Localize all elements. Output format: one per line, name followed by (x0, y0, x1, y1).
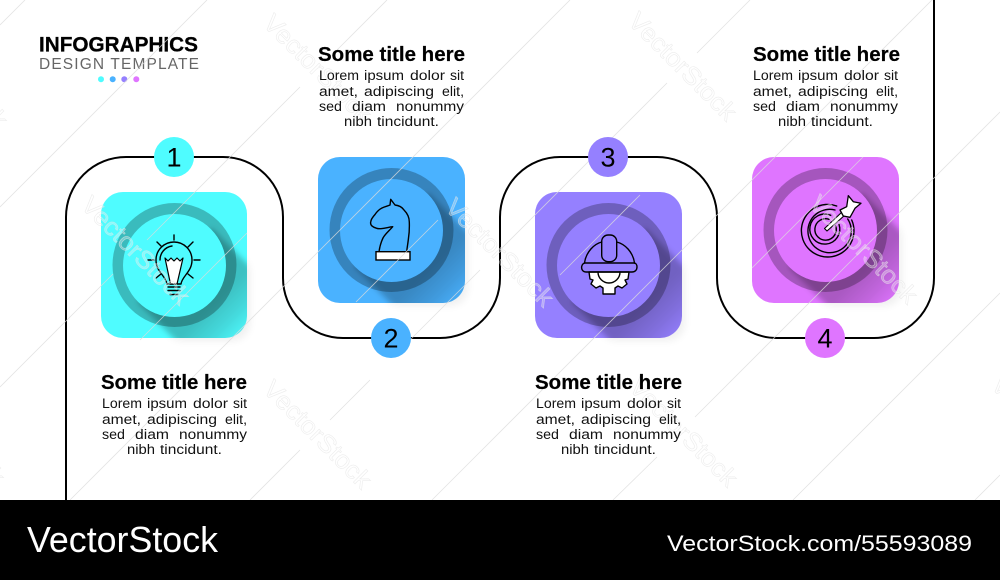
footer bar: VectorStock (27, 519, 219, 560)
text block: step 2: Lorem (319, 68, 359, 83)
text block: step 3: dolor (627, 396, 663, 411)
text block: step 3: Some title here (535, 372, 682, 394)
text block: step 2: nonummy (396, 99, 464, 114)
footer bar: VectorStock.com/55593089 (667, 531, 972, 556)
text block: step 3: elit, (659, 412, 681, 427)
panel: step 3 tile (535, 192, 684, 340)
watermark: VectorStock text: VectorStock (623, 7, 742, 127)
connector line (66, 0, 934, 500)
text block: step 2: ipsum (364, 68, 404, 83)
text block: step 2 (318, 44, 465, 129)
text block: step 4: elit, (876, 84, 898, 99)
icon: light bulb (148, 235, 200, 294)
text block: step 1: Lorem (102, 396, 142, 411)
header: infographics design template: INFOGRAPHICS (39, 34, 198, 56)
text block: step 1: sit (233, 396, 247, 411)
text block: step 3: diam (569, 427, 603, 442)
number badge 4 (805, 318, 845, 358)
text block: step 1: diam (135, 427, 169, 442)
text block: step 2: nibh (344, 114, 372, 129)
text block: step 2: amet, (319, 84, 358, 99)
number badge 4: 4 (817, 324, 833, 354)
text block: step 4: ipsum (798, 68, 838, 83)
text block: step 1: ipsum (147, 396, 187, 411)
number badge 3: 3 (600, 142, 616, 172)
text block: step 1: elit, (225, 412, 247, 427)
text block: step 1: nonummy (179, 427, 247, 442)
text block: step 3: Lorem (536, 396, 576, 411)
text block: step 1: adipiscing (147, 412, 217, 427)
number badge 3 (588, 137, 628, 177)
text block: step 4: Lorem (753, 68, 793, 83)
number badge 1: 1 (166, 142, 182, 172)
text block: step 4: nibh (778, 114, 806, 129)
text block: step 4: sit (884, 68, 898, 83)
text block: step 2: sit (450, 68, 464, 83)
text block: step 1: nibh (127, 442, 155, 457)
text block: step 4: Some title here (753, 44, 900, 66)
text block: step 4: nonummy (830, 99, 898, 114)
watermark: VectorStock text: VectorStock (258, 375, 377, 495)
text block: step 3 (535, 372, 682, 457)
text block: step 2: dolor (410, 68, 446, 83)
text block: step 2: Some title here (318, 44, 465, 66)
number badge 2 (371, 318, 411, 358)
text block: step 3: adipiscing (581, 412, 651, 427)
text block: step 3: ipsum (581, 396, 621, 411)
text block: step 1: Some title here (101, 372, 247, 394)
text block: step 4: tincidunt. (811, 114, 873, 129)
text block: step 2: elit, (442, 84, 464, 99)
icon: target with arrow (801, 196, 861, 257)
watermark: VectorStock text: VectorStock (76, 191, 195, 311)
footer bar (0, 500, 1000, 580)
text block: step 3: nonummy (613, 427, 681, 442)
text block: step 1: dolor (193, 396, 229, 411)
text block: step 4: diam (786, 99, 820, 114)
number badge 1 (154, 137, 194, 177)
text block: step 4: adipiscing (798, 84, 868, 99)
text block: step 4: amet, (753, 84, 792, 99)
text block: step 4 (753, 44, 900, 129)
text block: step 2: tincidunt. (377, 114, 439, 129)
panel: step 4 tile (752, 157, 902, 306)
text block: step 2: diam (352, 99, 386, 114)
header: infographics design template (39, 34, 199, 82)
text block: step 4: sed (753, 99, 776, 114)
text block: step 4: dolor (844, 68, 880, 83)
text block: step 2: sed (319, 99, 342, 114)
text block: step 1 (101, 372, 247, 457)
panel: step 2 tile (318, 157, 468, 306)
header: infographics design template: DESIGN TEMPLATE (39, 56, 199, 73)
text block: step 3: amet, (536, 412, 575, 427)
icon: chess knight (371, 199, 410, 260)
text block: step 2: adipiscing (364, 84, 434, 99)
text block: step 1: amet, (102, 412, 141, 427)
number badge 2: 2 (383, 324, 399, 354)
text block: step 3: sit (667, 396, 681, 411)
text block: step 3: sed (536, 427, 559, 442)
watermark: VectorStock text: VectorStock (258, 9, 377, 129)
text block: step 3: tincidunt. (594, 442, 656, 457)
icon: helmet with gear (582, 235, 637, 294)
text block: step 3: nibh (561, 442, 589, 457)
watermark: VectorStock text: VectorStock (440, 193, 559, 313)
panel: step 1 tile (101, 192, 250, 340)
text block: step 1: sed (102, 427, 125, 442)
watermark: VectorStock text: VectorStock (624, 373, 743, 493)
watermark: VectorStock text: VectorStock (804, 190, 923, 310)
text block: step 1: tincidunt. (160, 442, 222, 457)
